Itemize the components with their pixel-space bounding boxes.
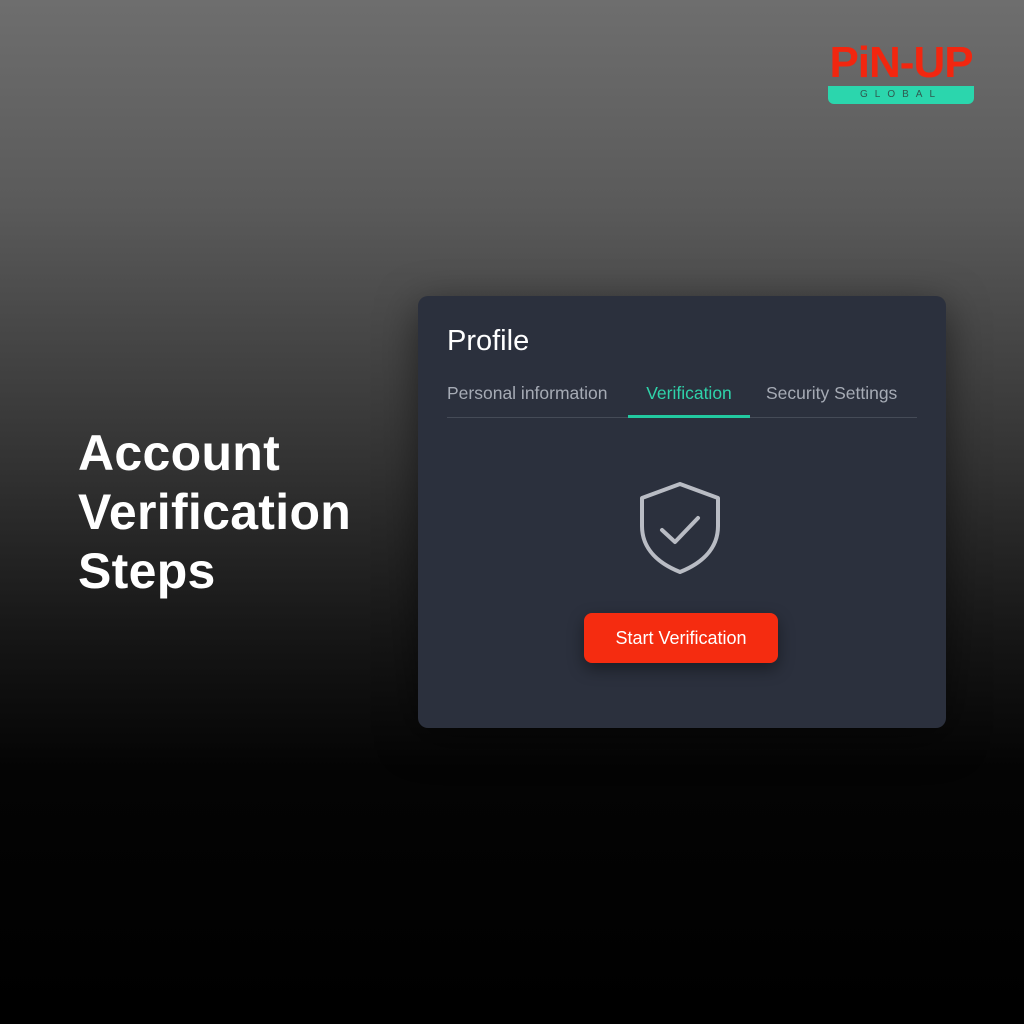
icon: shield check xyxy=(640,482,720,574)
card heading: Profile xyxy=(447,325,529,357)
logo text: PiN-UP xyxy=(829,38,973,87)
panel: profile card xyxy=(418,296,946,728)
title xyxy=(78,425,351,599)
logo bar xyxy=(828,86,974,104)
tabs xyxy=(447,383,917,418)
tab: verification active: Verification xyxy=(646,383,732,403)
button: start verification xyxy=(584,613,778,663)
title: Verification xyxy=(78,484,351,540)
title: Steps xyxy=(78,543,216,599)
button: start verification: Start Verification xyxy=(615,628,747,648)
tab: personal: Personal information xyxy=(447,383,608,403)
tab: security: Security Settings xyxy=(766,383,897,403)
logo bar: GLOBAL xyxy=(860,89,942,100)
title: Account xyxy=(78,425,280,481)
tab: verification active xyxy=(628,383,750,418)
logo xyxy=(828,38,974,104)
